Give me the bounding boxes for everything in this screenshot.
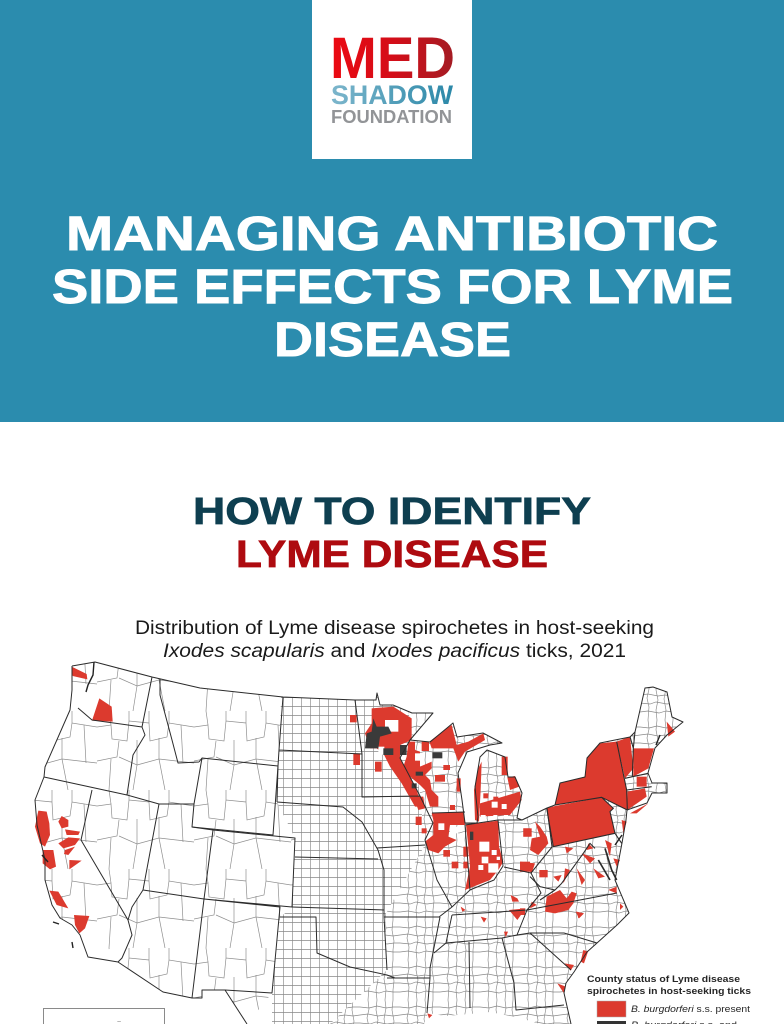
title: MANAGING ANTIBIOTIC xyxy=(66,208,718,261)
section heading: HOW TO IDENTIFY xyxy=(193,491,591,533)
logo: MedShadow Foundation xyxy=(312,0,472,159)
map legend: County status of Lyme disease xyxy=(587,974,740,985)
red counties: South xyxy=(427,895,588,1018)
title: DISEASE xyxy=(274,314,511,367)
Puget Sound and coastal details xyxy=(42,662,660,948)
county map of the United States xyxy=(34,662,684,1024)
legend item: present xyxy=(597,1001,750,1017)
map title: Distribution of Lyme disease spirochetes in host-seeking xyxy=(135,618,654,639)
section heading xyxy=(193,491,591,576)
map title xyxy=(135,618,654,662)
map title: Ixodes scapularis and Ixodes pacificus ticks, 2021 xyxy=(163,641,626,662)
section heading: LYME DISEASE xyxy=(236,534,548,576)
map legend: spirochetes in host-seeking ticks xyxy=(587,986,751,997)
white gaps between counties xyxy=(378,720,508,873)
state borders xyxy=(35,662,683,1024)
red counties: Northeast and Appalachia xyxy=(520,722,675,918)
logo: MedShadow Foundation: FOUNDATION xyxy=(331,107,452,127)
title: SIDE EFFECTS FOR LYME xyxy=(52,261,733,314)
red and dark counties: Midwest xyxy=(350,707,530,890)
logo: MedShadow Foundation: MED xyxy=(330,26,455,91)
map legend xyxy=(587,974,751,1024)
Alaska inset frame xyxy=(44,1008,164,1024)
Northeast state borders xyxy=(530,732,652,900)
red counties: West Coast xyxy=(35,667,113,933)
legend item: present: B. burgdorferi s.s. present xyxy=(631,1004,750,1015)
title xyxy=(52,208,733,367)
logo: MedShadow Foundation: SHADOW xyxy=(331,80,454,110)
header banner xyxy=(0,0,784,422)
